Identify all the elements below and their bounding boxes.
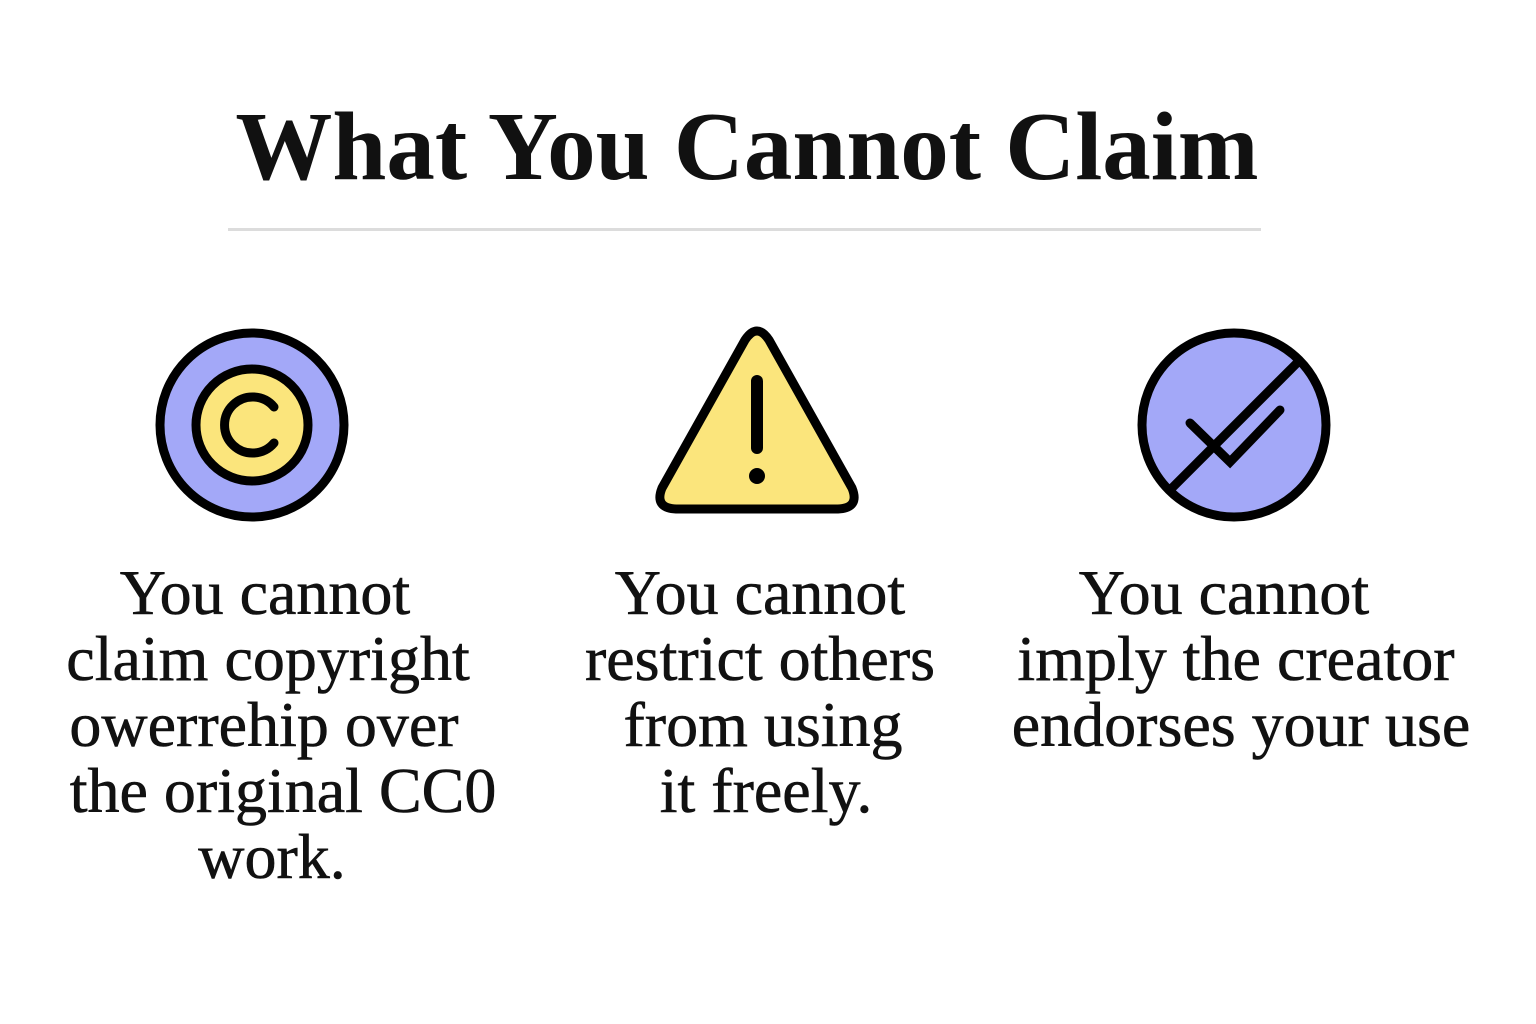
text: column 1: owerrehip over xyxy=(69,689,459,760)
text: column 3: endorses your use xyxy=(1012,689,1470,760)
text: column 1: claim copyright xyxy=(66,623,470,694)
text: column 3 xyxy=(1012,557,1470,760)
text: column 3: imply the creator xyxy=(1017,623,1455,694)
icon: warning triangle xyxy=(655,326,859,514)
text: column 1 xyxy=(66,557,496,892)
icon: copyright xyxy=(156,328,348,522)
text: column 1: the original CC0 xyxy=(70,755,496,826)
icon: crossed check xyxy=(1138,328,1330,522)
text: column 1: work. xyxy=(198,821,346,892)
text: column 2: restrict others xyxy=(585,623,935,694)
text: column 1: You cannot xyxy=(120,557,410,628)
text: column 3: You cannot xyxy=(1079,557,1369,628)
text: column 2: it freely. xyxy=(660,755,872,826)
text: column 2: You cannot xyxy=(615,557,905,628)
text: column 2 xyxy=(585,557,935,826)
title: What You Cannot Claim xyxy=(235,93,1259,200)
text: column 2: from using xyxy=(623,689,903,760)
